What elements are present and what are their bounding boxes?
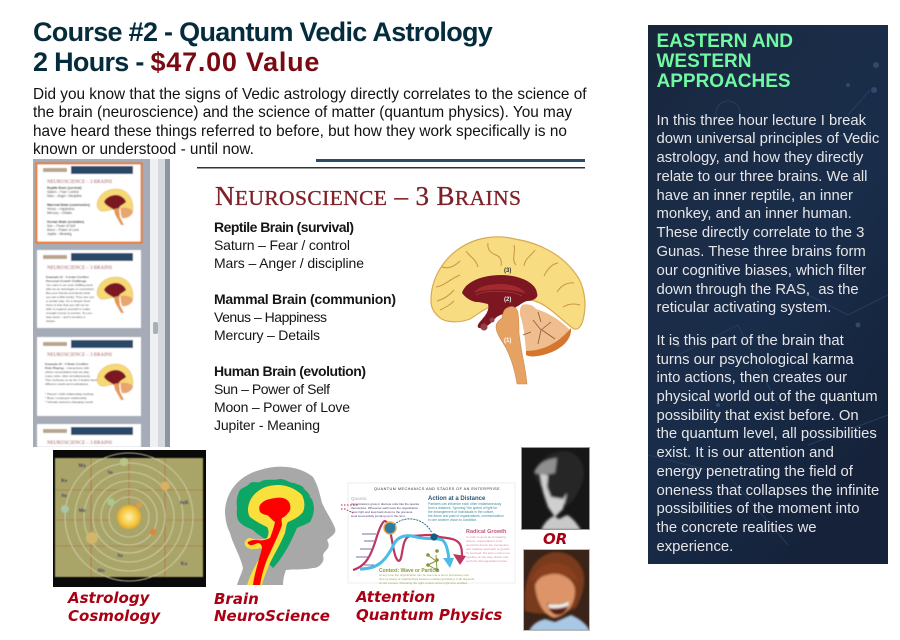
slide 3: * Parent / child relationship working — [45, 392, 94, 396]
sidebar paragraph 2: exist. It is our attention and — [656, 445, 834, 461]
brain diagram — [431, 237, 585, 384]
image: quantum mechanics chart: the future and past of organizations, communication — [428, 514, 504, 518]
slide text: brain list: Reptile Brain (survival) — [214, 219, 354, 235]
intro paragraph: the brain (neuroscience) and the science of matter (quantum physics). You may — [33, 104, 572, 121]
slide 1: Sun – Power of Self — [47, 224, 75, 228]
slide 1: Jupiter - Meaning — [47, 232, 72, 236]
slide 3: NEUROSCIENCE – 3 BRAINS — [47, 353, 112, 358]
sidebar heading — [656, 30, 793, 92]
slide 3: This confuses us as the 3 brains have — [45, 378, 97, 382]
image: quantum mechanics chart: on the context. Choosing the right context at the right time enables — [379, 581, 468, 585]
cerebrum — [431, 237, 585, 329]
brain diagram: (1) — [504, 338, 511, 344]
image: solar system chart: JuR — [180, 501, 189, 506]
intro paragraph: Did you know that the signs of Vedic astrology directly correlates to the science of — [33, 86, 587, 102]
sidebar paragraph 2: energy penetrating the field of — [656, 464, 853, 480]
title: 2 Hours - $47.00 Value — [33, 47, 320, 77]
image: solar system chart: Mo — [97, 569, 105, 574]
image: quantum mechanics chart: At any time the organization can be seen as a set of processes over — [379, 573, 469, 577]
image: quantum mechanics chart: Particles can influence each other instantaneously — [428, 502, 502, 506]
slide 3: Example #2 - 3 Brain Conflict: — [45, 362, 89, 366]
panel: neuroscience slide — [197, 159, 586, 433]
intro paragraph: have heard these things referred to before, but how they work specifically is no — [33, 122, 567, 140]
caption: astrology cosmology: Cosmology — [68, 606, 160, 624]
sidebar paragraph 2: the concrete realities we — [656, 520, 817, 536]
sidebar paragraph 1 — [656, 112, 879, 316]
image: quantum mechanics chart: themselves. Whenever each level the organization — [351, 506, 418, 510]
slide 1: Human Brain (evolution) — [47, 220, 84, 224]
image: solar system chart: Ka — [181, 562, 188, 567]
sidebar heading: WESTERN — [656, 50, 752, 72]
image: quantum mechanics chart: Action at a Distance — [428, 496, 486, 502]
slide text: brain list: Jupiter - Meaning — [214, 417, 320, 433]
caption: astrology cosmology — [67, 589, 161, 624]
slide 3 — [37, 337, 141, 416]
slide 2 — [37, 250, 141, 328]
slide 4: NEUROSCIENCE – 3 BRAINS — [47, 441, 112, 446]
intro paragraph — [33, 86, 587, 158]
slide 2: enough money to survive. So you — [46, 311, 92, 315]
image: quantum mechanics chart: time (a wave) or relationships between entities (particles). It all depends — [379, 577, 475, 581]
sidebar paragraph 1: down universal principles of Vedic — [656, 131, 879, 147]
sidebar paragraph 2: possibility that exist before. On — [656, 408, 859, 424]
slide 2: there is fear that you will not be — [46, 303, 89, 307]
image: quantum mechanics chart: returns, organizations must — [466, 539, 502, 543]
image: solar system chart: Su — [61, 494, 67, 499]
image: quantum mechanics chart: together on the way, dream and — [466, 555, 508, 559]
image: quantum mechanics chart: push the disorganization future — [466, 559, 507, 563]
brain diagram: (3) — [504, 268, 511, 274]
image: solar system chart: Ke — [61, 479, 68, 484]
slide text: brain list: Saturn – Fear / control — [214, 237, 350, 253]
caption: brain neuroscience: NeuroScience — [214, 607, 330, 625]
sidebar paragraph 2: the quantum level, all possibilities — [656, 426, 877, 442]
slide text: brain list: Venus – Happiness — [214, 309, 327, 325]
caption: attention quantum physics: Quantum Physics — [356, 606, 502, 624]
image: quantum mechanics chart — [341, 482, 516, 585]
slide 1: NEUROSCIENCE – 3 BRAINS — [47, 180, 112, 185]
image: quantum mechanics chart: the entanglement of individuals in the culture, — [428, 510, 494, 514]
slide 1: Mercury – Details — [47, 211, 72, 215]
image: quantum mechanics chart: Context: Wave or Particle — [379, 568, 440, 574]
slide 2: Example #1 - 3 brain Conflict: — [46, 275, 89, 279]
sidebar paragraph 1: relate to our three brains. We all — [656, 169, 867, 185]
slide 2: able to support yourself or make — [46, 307, 90, 311]
sidebar paragraph 1: Gunas. These three brains form — [656, 244, 866, 260]
slide 3: many roles, often simultaneously. — [45, 374, 91, 378]
image: quantum mechanics chart: Organizations grow in discrete units like the quanta — [351, 502, 419, 506]
image: quantum mechanics chart: must right and leap back down to the previous — [351, 510, 413, 514]
sidebar paragraph 2: possibilities of the moment into — [656, 501, 859, 517]
image: quantum mechanics chart: Quanta — [351, 496, 367, 501]
cerebellum — [520, 304, 569, 353]
image: quantum mechanics chart: QUANTUM MECHANICS AND STAGES OF AN ENTERPRISE — [374, 487, 500, 491]
slide 2: NEUROSCIENCE – 3 BRAINS — [47, 266, 112, 271]
title: Course #2 - Quantum Vedic Astrology — [33, 17, 492, 47]
slide 3: Role Playing – interactions with — [45, 366, 89, 370]
sidebar paragraph 1: down through the RAS, as the — [656, 282, 859, 298]
sidebar paragraph 1: In this three hour lecture I break — [656, 112, 866, 128]
slide 2: You want to do more fulfilling work — [46, 283, 93, 287]
panel: slide thumbnails — [33, 159, 170, 447]
slide 2: But your friends and family think — [46, 291, 90, 295]
caption: brain neuroscience: Brain — [214, 590, 259, 608]
title — [33, 17, 493, 77]
photo: smiling woman — [523, 549, 590, 631]
slide 2: you are a little kooky. They see you — [46, 295, 94, 299]
caption: astrology cosmology: Astrology — [68, 589, 149, 607]
sidebar paragraph 1: have an inner reptile, an inner — [656, 188, 853, 204]
slide 4 — [37, 424, 141, 447]
image: quantum mechanics chart: somehow freeze the momentum — [466, 543, 509, 547]
sidebar paragraph 1: These directly correlate to the 3 — [656, 225, 864, 241]
label: OR: OR — [543, 530, 567, 548]
slide 3: different needs and motivations. — [45, 382, 89, 386]
slide 2: a certain way. On a deeper level — [46, 299, 90, 303]
slide 2: stay stuck – and it remains a — [46, 315, 85, 319]
image: brain head profile — [225, 466, 336, 585]
image: quantum mechanics chart: from a distance, "ignoring" the speed of light for — [428, 506, 498, 510]
slide 1 — [36, 164, 142, 242]
slide 2: Personal Growth Challenge — [46, 279, 87, 283]
sidebar paragraph 2: turns our psychological karma — [656, 352, 854, 368]
intro paragraph: known or understood - until now. — [33, 141, 254, 158]
slide text: brain list: Sun – Power of Self — [214, 381, 330, 397]
slide 1: Saturn – Fear / control — [47, 190, 79, 194]
panel: eastern and western approaches — [648, 25, 888, 564]
sidebar paragraph 2: It is this part of the brain that — [656, 333, 844, 349]
sidebar paragraph 2 — [656, 333, 879, 555]
image: solar system chart: Ve — [107, 471, 113, 476]
sidebar paragraph 1: astrology, and how they directly — [656, 150, 863, 166]
brain stem — [496, 307, 527, 384]
slide 1: Mars – Anger / discipline — [47, 194, 82, 198]
image: quantum mechanics chart: and collapse approach to growth. — [466, 547, 510, 551]
image: solar system chart: Sa — [117, 554, 123, 559]
slide 3: * Intimate partners changing needs — [45, 400, 93, 404]
image: solar system chart: Me — [79, 509, 86, 514]
sidebar heading: EASTERN AND — [656, 30, 793, 52]
slide text: brain list: Mammal Brain (communion) — [214, 291, 396, 307]
caption: attention quantum physics — [355, 588, 502, 624]
slide 1: Mammal Brain (communion) — [47, 203, 90, 207]
sidebar paragraph 1: monkey, and an inner human. — [656, 206, 852, 222]
brain diagram: (2) — [504, 297, 511, 303]
caption: attention quantum physics: Attention — [356, 588, 435, 606]
slide 2: dream. — [46, 319, 56, 323]
image: solar system chart: Ma — [78, 464, 86, 469]
slide 3: * Boss / employee relationship — [45, 396, 87, 400]
photo: black and white portrait — [521, 447, 590, 530]
slide 1: Moon – Power of Love — [47, 228, 79, 232]
slide 1: Venus – Happiness — [47, 207, 75, 211]
sidebar paragraph 2: experience. — [656, 539, 733, 555]
slide heading: NEUROSCIENCE – 3 BRAINS — [215, 181, 521, 211]
slide text: brain list: Mercury – Details — [214, 327, 320, 343]
slide 2: (like as an astrologer or counselor). — [46, 287, 95, 291]
slide text: brain list — [214, 219, 396, 433]
image: quantum mechanics chart: level successfully jumping up to the next. — [351, 514, 406, 518]
caption: brain neuroscience — [214, 590, 330, 625]
image: quantum mechanics chart: Radical Growth — [466, 529, 507, 535]
image: solar system chart — [53, 450, 206, 587]
image: quantum mechanics chart: To succeed, the team must move — [466, 551, 510, 555]
sidebar heading: APPROACHES — [656, 70, 791, 92]
sidebar paragraph 2: physical world out of the quantum — [656, 389, 878, 405]
image: quantum mechanics chart: In order to grow an increasing — [466, 535, 506, 539]
slide 3: others necessitates that we play — [45, 370, 89, 374]
image: quantum mechanics chart: in one another vision to condition. — [428, 518, 477, 522]
slide text: brain list: Mars – Anger / discipline — [214, 255, 364, 271]
panel: eastern and western approaches: reticular activating system. — [656, 300, 831, 316]
sidebar paragraph 1: our cognitive biases, which filter — [656, 263, 866, 279]
sidebar starfield background — [648, 62, 888, 545]
sidebar paragraph 2: into actions, then creates our — [656, 370, 847, 386]
slide text: brain list: Human Brain (evolution) — [214, 363, 366, 379]
slide 1: Reptile Brain (survival) — [47, 186, 82, 190]
sidebar paragraph 2: oneness that collapses the infinite — [656, 482, 879, 498]
slide text: brain list: Moon – Power of Love — [214, 399, 350, 415]
limbic system — [462, 275, 537, 328]
